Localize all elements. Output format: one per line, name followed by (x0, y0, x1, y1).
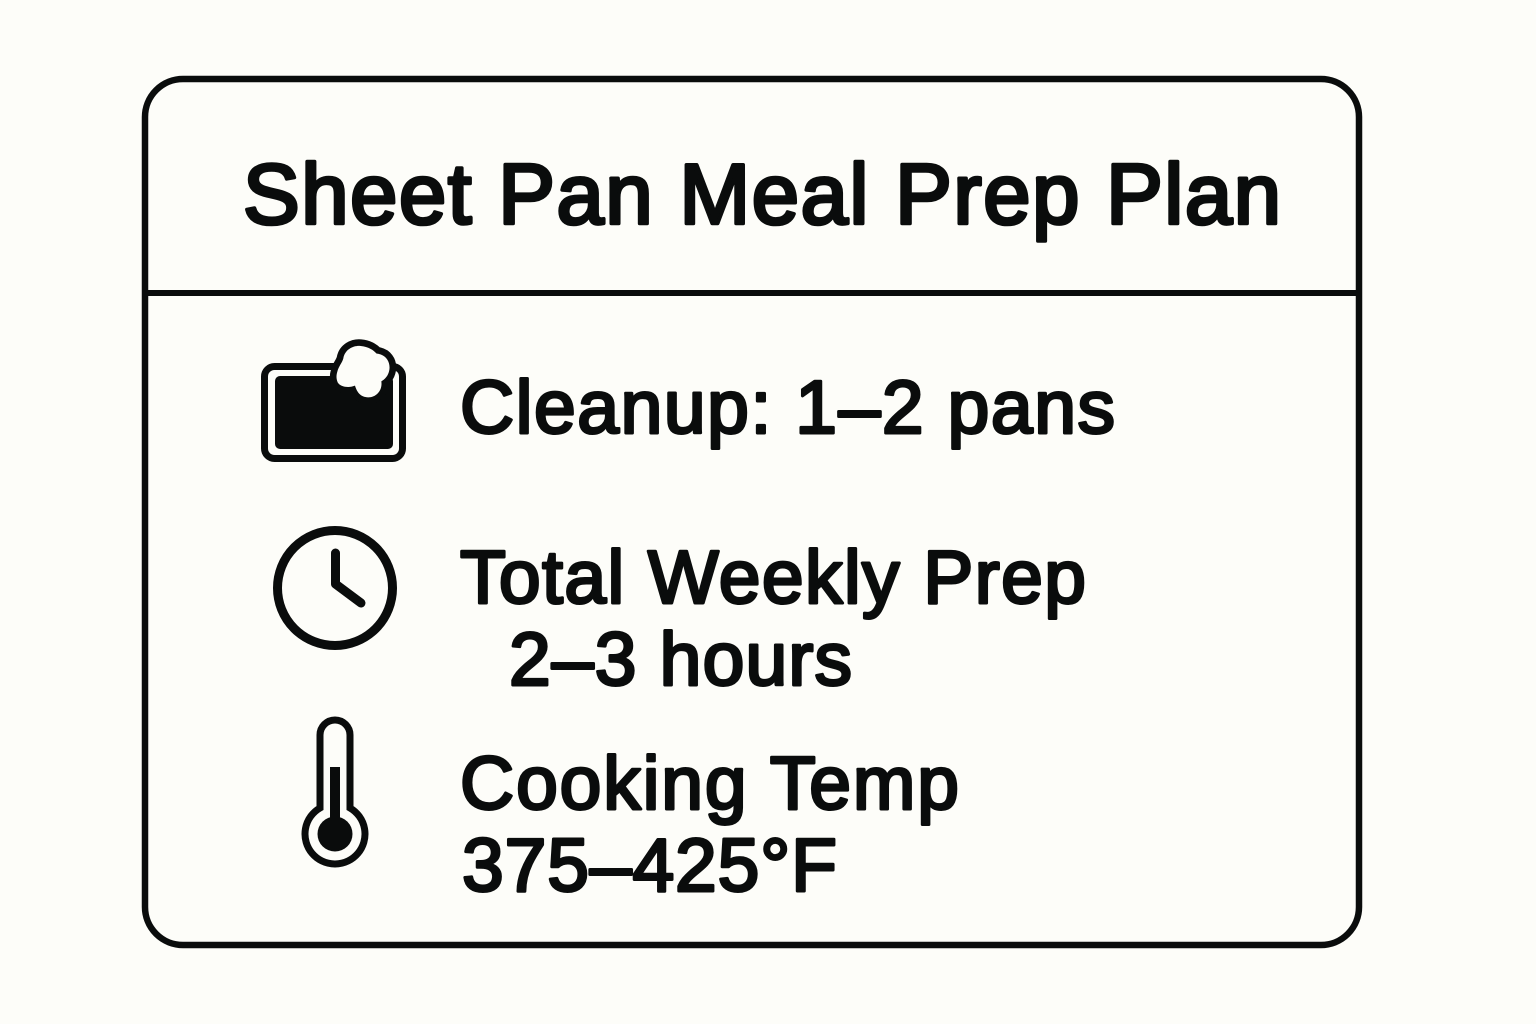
text: cleanup: Cleanup: 1–2 pans (460, 365, 1115, 449)
icon: clock (278, 530, 392, 646)
text: cooking temp (460, 741, 959, 907)
panel: plan card (145, 79, 1359, 945)
text: cooking temp: 375–425°F (462, 823, 837, 907)
text: total weekly prep: 2–3 hours (509, 617, 852, 701)
text: total weekly prep (460, 535, 1086, 701)
text: total weekly prep: Total Weekly Prep (460, 535, 1086, 619)
title: Sheet Pan Meal Prep Plan (243, 148, 1281, 242)
icon: sheet pan with soap (264, 346, 402, 458)
icon: thermometer (305, 720, 365, 864)
text: cooking temp: Cooking Temp (460, 741, 959, 825)
